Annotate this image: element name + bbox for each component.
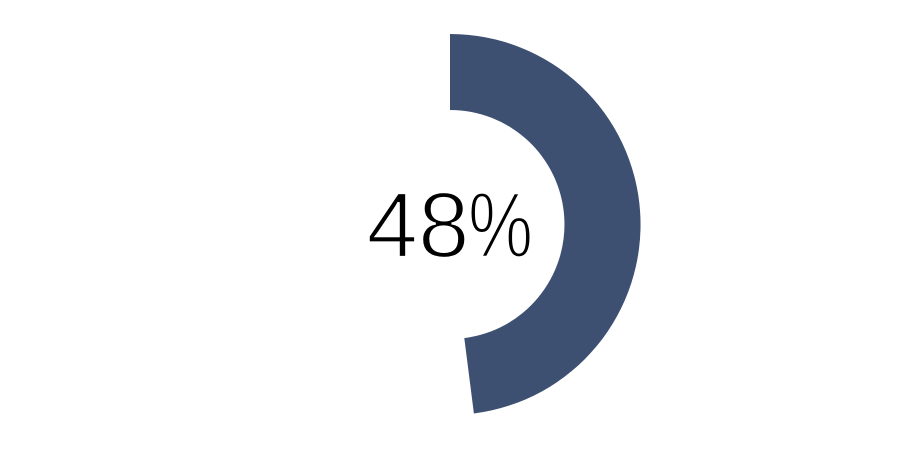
center value label: 48: [366, 173, 470, 277]
arc: 48% segment: [450, 34, 641, 413]
center value label: [366, 173, 533, 277]
center value label: %: [468, 173, 533, 277]
